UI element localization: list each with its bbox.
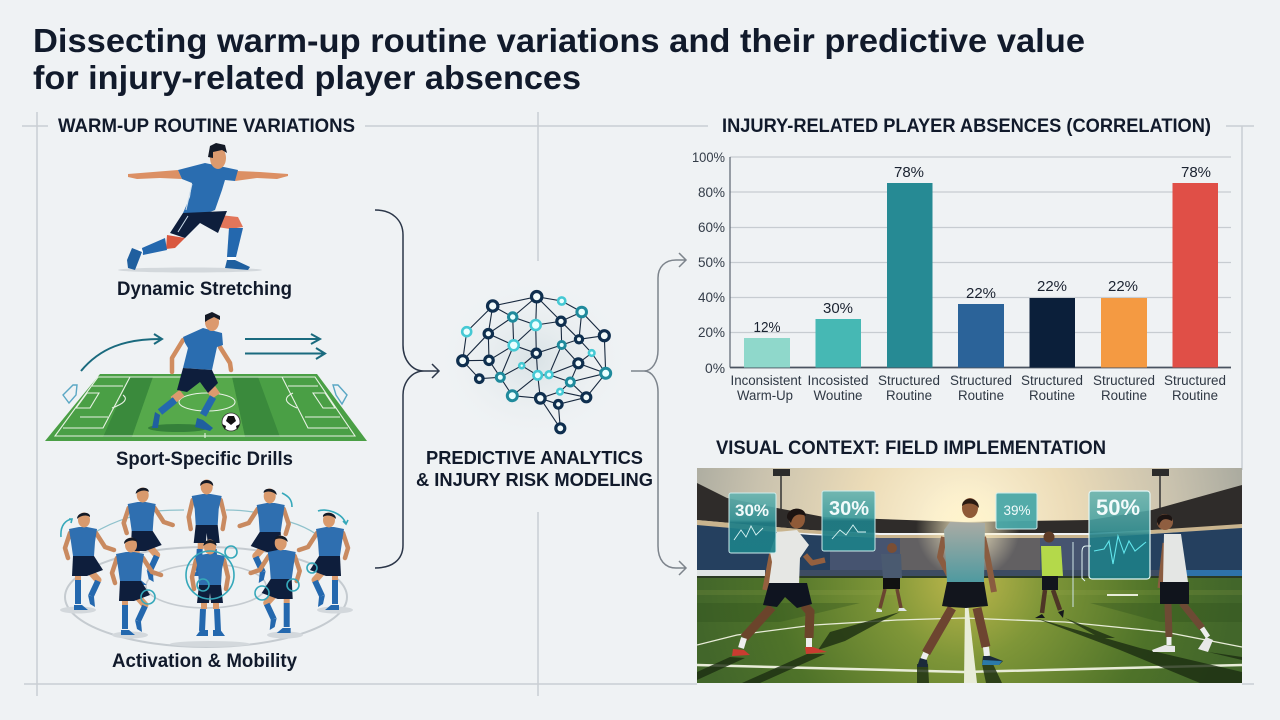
player silhouettes <box>732 498 1213 667</box>
category labels: Structured <box>1093 373 1155 388</box>
heading: injury-related player absences: INJURY-RELATED PLAYER ABSENCES (CORRELATION) <box>722 116 1211 137</box>
category labels: Routine <box>1029 388 1075 403</box>
category labels: Routine <box>886 388 932 403</box>
label: predictive analytics: & INJURY RISK MODELING <box>416 469 653 490</box>
value labels: 30% <box>823 301 853 317</box>
category labels: Structured <box>950 373 1012 388</box>
value labels: 22% <box>966 286 996 302</box>
value labels: 12% <box>754 320 781 336</box>
y axis labels: 80% <box>698 184 725 200</box>
data overlay panel 3: 39% <box>1003 503 1031 518</box>
photo: field implementation <box>697 468 1242 683</box>
category labels: Routine <box>1172 388 1218 403</box>
value labels: 22% <box>1108 279 1138 295</box>
data overlay panel 4: 50% <box>1096 495 1140 520</box>
title: for injury-related player absences <box>33 60 581 97</box>
data overlay panel 4 <box>1082 491 1150 581</box>
heading: warm-up routine variations: WARM-UP ROUTINE VARIATIONS <box>58 116 355 137</box>
y axis labels: 50% <box>698 254 725 270</box>
category labels: Routine <box>958 388 1004 403</box>
icon: neural network brain <box>434 275 634 445</box>
data overlay panel 1 <box>729 493 776 553</box>
icon: activation and mobility group <box>60 480 353 647</box>
arrow: bracket out to chart and photo <box>631 253 686 575</box>
category labels <box>730 373 1226 403</box>
category labels: Inconsistent <box>730 373 802 388</box>
icon: dynamic stretching player <box>118 143 288 272</box>
label: activation and mobility: Activation & Mobility <box>112 651 297 672</box>
label: sport-specific drills: Sport-Specific Drills <box>116 449 293 470</box>
data overlay panel 3 <box>996 493 1037 529</box>
value labels <box>754 165 1211 336</box>
value labels: 78% <box>894 165 924 181</box>
y axis labels: 0% <box>705 360 725 376</box>
y axis labels: 100% <box>692 149 725 165</box>
bar chart <box>692 149 1231 403</box>
player shadows <box>697 612 1242 683</box>
category labels: Warm-Up <box>737 388 793 403</box>
y axis labels: 60% <box>698 219 725 235</box>
arrow: bracket into model <box>375 210 439 568</box>
title: Dissecting warm-up routine variations and their predictive value <box>33 23 1085 60</box>
label: predictive analytics <box>416 447 653 490</box>
title <box>33 23 1085 97</box>
category labels: Woutine <box>814 388 862 403</box>
category labels: Routine <box>1101 388 1147 403</box>
y axis labels: 20% <box>698 324 725 340</box>
pitch markings <box>697 542 1242 683</box>
data overlay panel 2: 30% <box>829 498 869 520</box>
y axis labels <box>692 149 725 376</box>
heading: visual context: VISUAL CONTEXT: FIELD IMPLEMENTATION <box>716 438 1106 459</box>
value labels: 78% <box>1181 165 1211 181</box>
category labels: Structured <box>1164 373 1226 388</box>
value labels: 22% <box>1037 279 1067 295</box>
category labels: Structured <box>1021 373 1083 388</box>
data overlay panel 1: 30% <box>735 501 769 520</box>
y axis labels: 40% <box>698 289 725 305</box>
label: dynamic stretching: Dynamic Stretching <box>117 279 292 300</box>
category labels: Structured <box>878 373 940 388</box>
icon: sport-specific drills pitch and player <box>45 312 367 441</box>
data overlay panel 2 <box>822 491 875 551</box>
label: predictive analytics: PREDICTIVE ANALYTICS <box>426 447 643 468</box>
category labels: Incosisted <box>808 373 868 388</box>
bars <box>744 183 1218 368</box>
